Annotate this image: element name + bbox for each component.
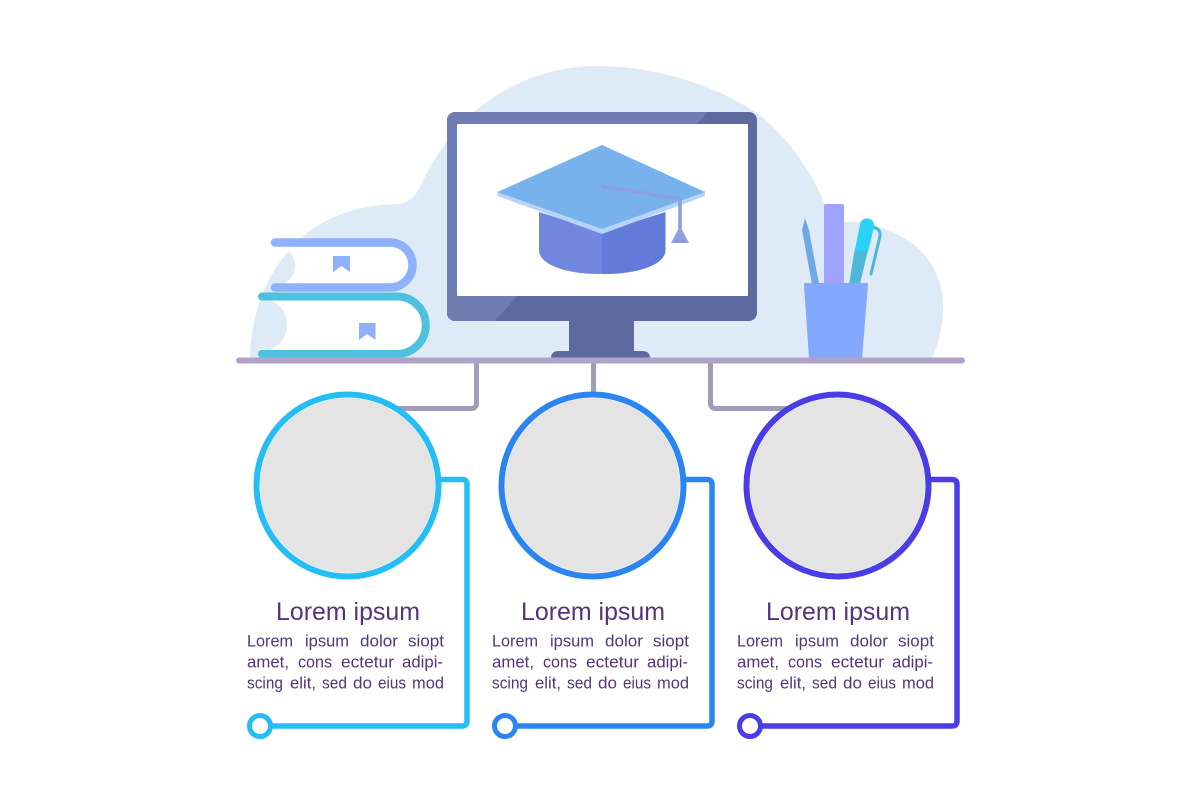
body text 3: amet, [737,654,779,672]
bottom book cover [262,296,426,354]
cap base right [602,212,666,274]
monitor stand [569,318,634,354]
body text 3 [737,632,934,692]
graduation cap [498,145,705,274]
body text 3: adipi- [892,654,933,672]
body text 1: elit, [290,674,316,692]
tassel end [671,226,689,243]
circle placeholder 3 [746,394,928,576]
body text 2: siopt [653,632,689,650]
background cloud blob [250,66,943,358]
pen body [849,248,868,284]
top book bookmark [333,256,350,272]
body text 3: cons [788,654,822,672]
body text 2: do [598,674,617,692]
books stack [262,242,426,354]
body text 2: sed [567,674,592,692]
board top [498,145,705,229]
end node 2 [494,716,516,736]
body text 1: sed [322,674,347,692]
pen cap [855,218,874,252]
body text 2: scing [492,674,528,692]
body text 2: cons [543,654,577,672]
column 1 [247,394,467,736]
computer monitor [447,112,757,358]
top book cover [275,242,412,288]
body text 1: do [353,674,372,692]
body text 2: Lorem [492,632,538,650]
body text 2: amet, [492,654,534,672]
heading 2: Lorem ipsum [521,599,665,626]
body text 3: dolor [850,632,889,650]
body text 2: dolor [605,632,644,650]
monitor base [551,351,650,358]
body text 1: Lorem [247,632,293,650]
leader line 2 [515,480,712,726]
body text 1: mod [412,674,444,692]
monitor screen [457,124,748,296]
body text 2: ipsum [550,632,594,650]
body text 1: siopt [408,632,444,650]
body text 1 [247,632,444,692]
leader line 1 [270,480,467,726]
end node 1 [250,716,270,736]
pencil cup [802,204,880,358]
body text 1: ectetur [341,654,395,672]
body text 1: ipsum [305,632,349,650]
tassel cord [601,186,680,230]
end node 3 [740,716,760,736]
body text 1: adipi- [402,654,443,672]
body text 1: cons [298,654,332,672]
ruler [824,204,844,286]
pen clip [871,227,880,274]
body text 2: ectetur [586,654,640,672]
body text 3: Lorem [737,632,783,650]
column 3 [737,394,957,736]
cup [804,283,868,358]
bottom book bookmark [359,323,376,340]
body text 2: eius [623,674,651,692]
body text 3: scing [737,674,773,692]
body text 2: elit, [535,674,561,692]
circle placeholder 2 [502,394,684,576]
shelf [236,358,965,364]
board edge [498,191,705,234]
column 2 [492,394,712,736]
monitor frame [447,112,757,321]
body text 3: mod [902,674,934,692]
body text 1: eius [378,674,406,692]
heading 1: Lorem ipsum [276,599,420,626]
leader line 3 [760,480,957,726]
body text 3: sed [812,674,837,692]
pencil [802,218,819,284]
body text 2: adipi- [647,654,688,672]
body text 3: ectetur [831,654,885,672]
body text 3: do [843,674,862,692]
body text 3: elit, [780,674,806,692]
cap base left [539,212,602,274]
body text 2 [492,632,689,692]
body text 3: siopt [898,632,934,650]
top book pages [280,247,412,287]
body text 1: dolor [360,632,399,650]
circle placeholder 1 [256,394,438,576]
connector middle [591,362,596,394]
body text 2: mod [657,674,689,692]
connector right [710,362,795,408]
frame highlight [447,112,708,321]
body text 3: eius [868,674,896,692]
body text 3: ipsum [795,632,839,650]
connector left [395,362,476,408]
bottom book pages [268,300,422,350]
body text 1: amet, [247,654,289,672]
heading 3: Lorem ipsum [766,599,910,626]
body text 1: scing [247,674,283,692]
